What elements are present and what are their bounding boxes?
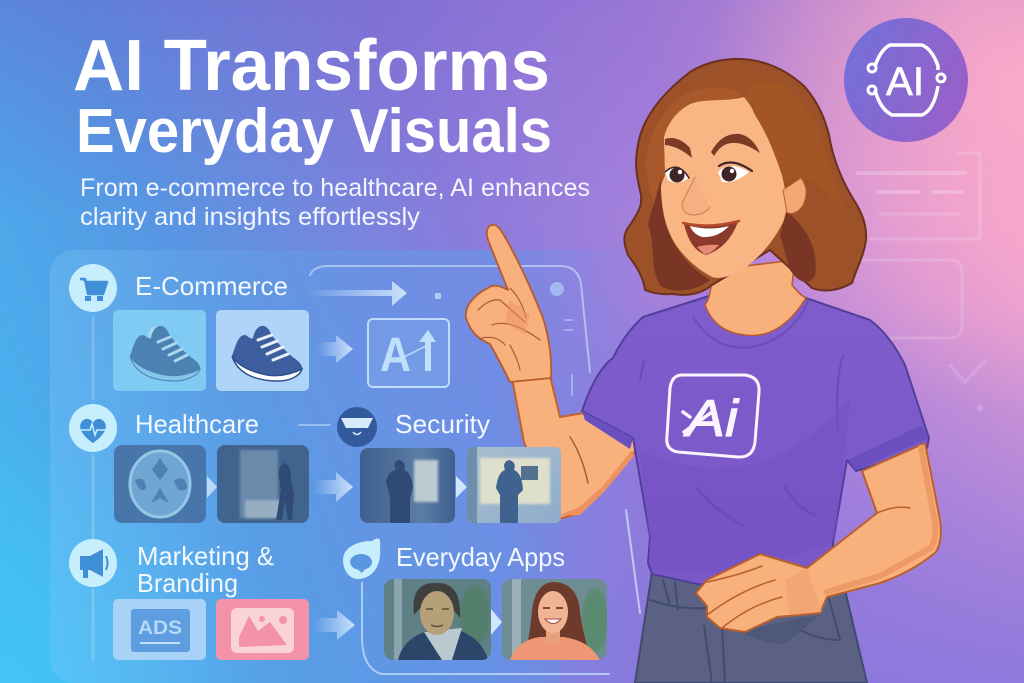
- arrow: [456, 476, 467, 498]
- icon: AI box: A: [380, 329, 411, 382]
- heading: healthcare: Healthcare: [135, 409, 259, 439]
- icon: shopping cart: [69, 264, 117, 312]
- subtitle: From e-commerce to healthcare, AI enhances: [80, 174, 590, 202]
- section: healthcare: [69, 404, 353, 523]
- eye: right: [718, 162, 752, 182]
- dot: [435, 293, 441, 299]
- image: original shoe: [113, 310, 206, 391]
- hair front: [646, 81, 845, 291]
- icon: megaphone: [69, 539, 117, 587]
- image: brain scan: [114, 445, 206, 523]
- logo badge: AI: [844, 18, 968, 142]
- shirt logo: Ai: [667, 375, 759, 457]
- arm and hand: resting: [696, 443, 941, 632]
- panel frame lines: [93, 266, 640, 674]
- arrow: [318, 335, 353, 363]
- icon: AI box: [368, 319, 449, 387]
- title: [73, 26, 552, 166]
- shirt logo: Ai: Ai: [683, 390, 740, 448]
- arrow: [207, 476, 217, 498]
- neck: [705, 260, 806, 336]
- image: dark corridor: [217, 445, 309, 523]
- subtitle: [80, 174, 590, 231]
- image: dark camera footage: [360, 448, 455, 523]
- image: original portrait: [384, 579, 491, 660]
- eye: left: [665, 167, 689, 183]
- heading: marketing and branding: Branding: [137, 568, 238, 598]
- heading: security: Security: [395, 409, 490, 439]
- heading: e-commerce: E-Commerce: [135, 271, 288, 301]
- image: ads banner: ADS: [138, 618, 182, 639]
- logo badge: AI: AI: [886, 60, 924, 104]
- hand: pointing: [466, 225, 551, 382]
- shirt: [582, 295, 929, 585]
- nose: [682, 177, 710, 215]
- image: enhanced portrait: [502, 579, 608, 660]
- mouth: [683, 221, 739, 255]
- arm: pointing arm: [512, 376, 640, 520]
- image: ads banner: [113, 599, 206, 660]
- arrow: [491, 609, 502, 635]
- face: [661, 97, 806, 278]
- icon: security camera: [337, 407, 377, 447]
- panel: use-case dashboard: [50, 250, 640, 683]
- image: enhanced camera footage: [467, 447, 561, 523]
- title: AI Transforms: [73, 26, 550, 106]
- title: Everyday Visuals: [76, 97, 552, 166]
- heading: marketing and branding: [137, 541, 274, 598]
- section: everyday apps: [343, 538, 608, 660]
- icon: chat bubble: [343, 538, 380, 579]
- heading: everyday apps: Everyday Apps: [396, 542, 565, 572]
- brows: [665, 134, 760, 158]
- section: e-commerce: [69, 264, 449, 391]
- arrow: top: [305, 281, 407, 306]
- icon: heart: [69, 404, 117, 452]
- heading: marketing and branding: Marketing &: [137, 541, 274, 571]
- subtitle: clarity and insights effortlessly: [80, 203, 421, 231]
- section: marketing and branding: [69, 539, 355, 660]
- arrow: [314, 610, 355, 640]
- image: enhanced shoe: [216, 310, 309, 391]
- image: pink picture icon: [216, 599, 309, 660]
- illustration: woman pointing: [466, 59, 941, 683]
- hair back: [624, 59, 866, 295]
- arrow: [314, 472, 353, 502]
- faint decorative UI shapes on right: [858, 153, 986, 411]
- pants: [635, 572, 867, 683]
- section: security: [337, 407, 490, 523]
